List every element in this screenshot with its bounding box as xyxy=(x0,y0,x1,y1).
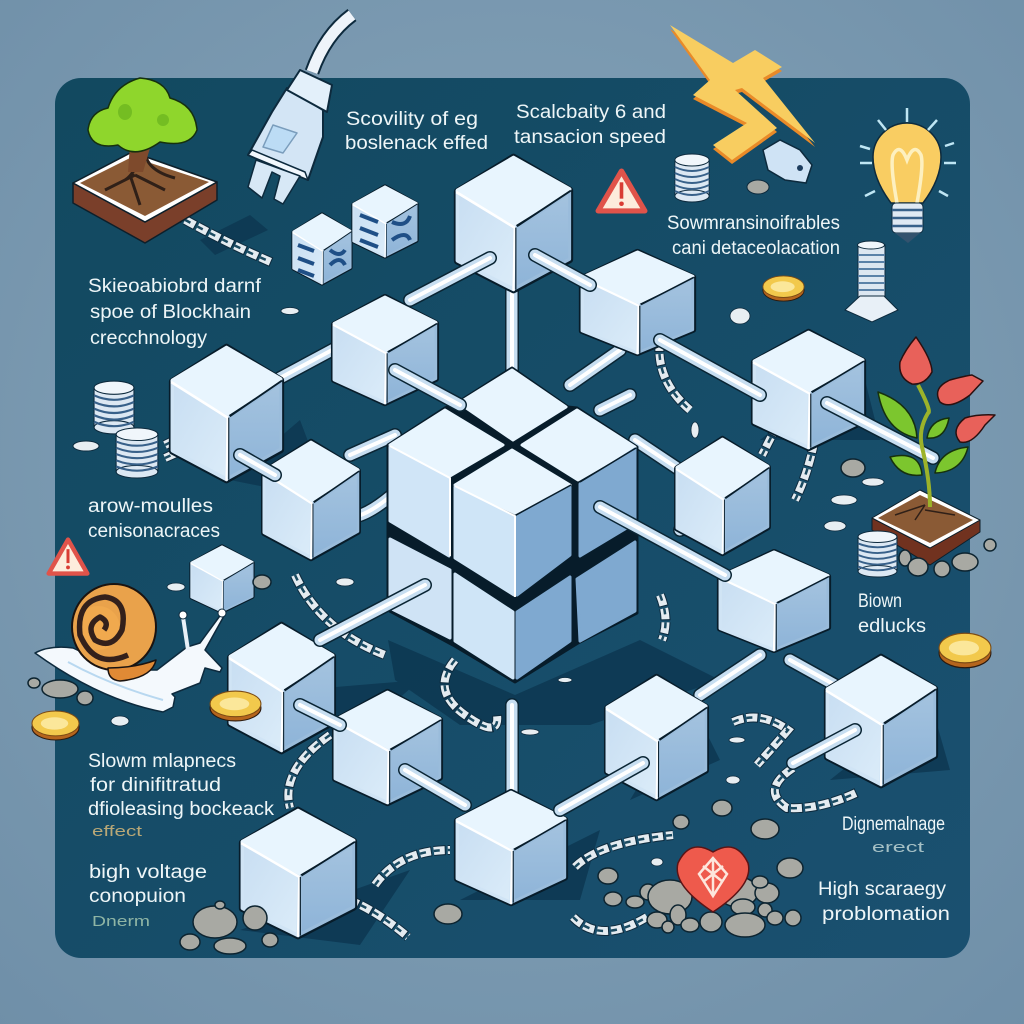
text: consequences xyxy=(88,496,220,542)
text: high scarcity: High scaraegy xyxy=(818,879,947,900)
text: blockchain technology: crecchnology xyxy=(90,328,208,349)
text: damage note: erect xyxy=(872,839,925,856)
icon: small creature and rock xyxy=(747,140,812,194)
text: transaction note: cani detaceolacation xyxy=(672,238,840,259)
icon: warning triangle top xyxy=(598,171,645,211)
text: damage note xyxy=(842,814,945,856)
text: blockchain technology xyxy=(88,276,262,349)
icon: snail xyxy=(35,584,226,712)
text: consequences: cenisonacraces xyxy=(88,521,220,542)
shadows under network xyxy=(200,215,950,945)
text: slowdown note: dfioleasing bockeack xyxy=(88,799,275,820)
text: right note: edlucks xyxy=(858,616,926,637)
icon: coin stacks left xyxy=(73,381,158,478)
text: transaction note xyxy=(667,213,840,259)
text: scalability and speed: Scalcbaity 6 and xyxy=(516,102,666,123)
text: high voltage xyxy=(89,862,207,930)
text: damage note: Dignemalnage xyxy=(842,814,945,835)
icon: coin stack top xyxy=(675,154,709,202)
text: scalability and speed: tansacion speed xyxy=(514,127,666,148)
text: right note: Biown xyxy=(858,591,902,612)
text: high voltage: bigh voltage xyxy=(89,862,207,883)
blockchain node cubes xyxy=(171,158,936,937)
main dark panel xyxy=(55,78,970,958)
text: bottleneck note: boslenack effed xyxy=(345,133,488,154)
icon: coins left xyxy=(32,691,261,740)
icon: broken heart xyxy=(677,847,749,912)
text: transaction note: Sowmransinoifrables xyxy=(667,213,840,234)
central cube cluster xyxy=(388,368,637,682)
text: high voltage: conopuion xyxy=(89,886,186,907)
text: blockchain technology: Skieoabiobrd darnf xyxy=(88,276,262,297)
text: slowdown note: effect xyxy=(92,823,143,840)
small patterned cubes xyxy=(293,186,417,284)
text: high scarcity xyxy=(818,879,950,925)
icon: power plug xyxy=(248,15,352,204)
back connecting rods xyxy=(280,285,835,792)
icon: coin stack lower right xyxy=(858,531,897,577)
text: blockchain technology: spoe of Blockhain xyxy=(90,302,251,323)
icon: coin right xyxy=(939,633,991,668)
icon: lightning bolt xyxy=(670,25,815,164)
text: bottleneck note xyxy=(345,109,488,154)
scattered rocks and pebbles xyxy=(28,459,996,954)
front connecting rods xyxy=(240,255,933,810)
text: high voltage: Dnerm xyxy=(92,913,150,930)
broken chains xyxy=(165,213,858,937)
text: high scarcity: problomation xyxy=(822,904,950,925)
icon: tree on soil xyxy=(73,78,217,243)
icon: coin mid right xyxy=(763,276,804,301)
text: bottleneck note: Scovility of eg xyxy=(346,109,478,130)
text: right note xyxy=(858,591,926,637)
icon: light bulb xyxy=(860,108,956,243)
text: slowdown note: Slowm mlapnecs xyxy=(88,751,236,772)
text: scalability and speed xyxy=(514,102,666,148)
text: consequences: arow-moulles xyxy=(88,496,213,517)
small white seed flakes xyxy=(111,308,884,866)
icon: screw xyxy=(845,241,898,322)
icon: flower on soil xyxy=(872,337,995,565)
icon: warning triangle left xyxy=(49,540,87,574)
text: slowdown note xyxy=(88,751,275,840)
text: slowdown note: for dinifitratud xyxy=(90,775,221,796)
